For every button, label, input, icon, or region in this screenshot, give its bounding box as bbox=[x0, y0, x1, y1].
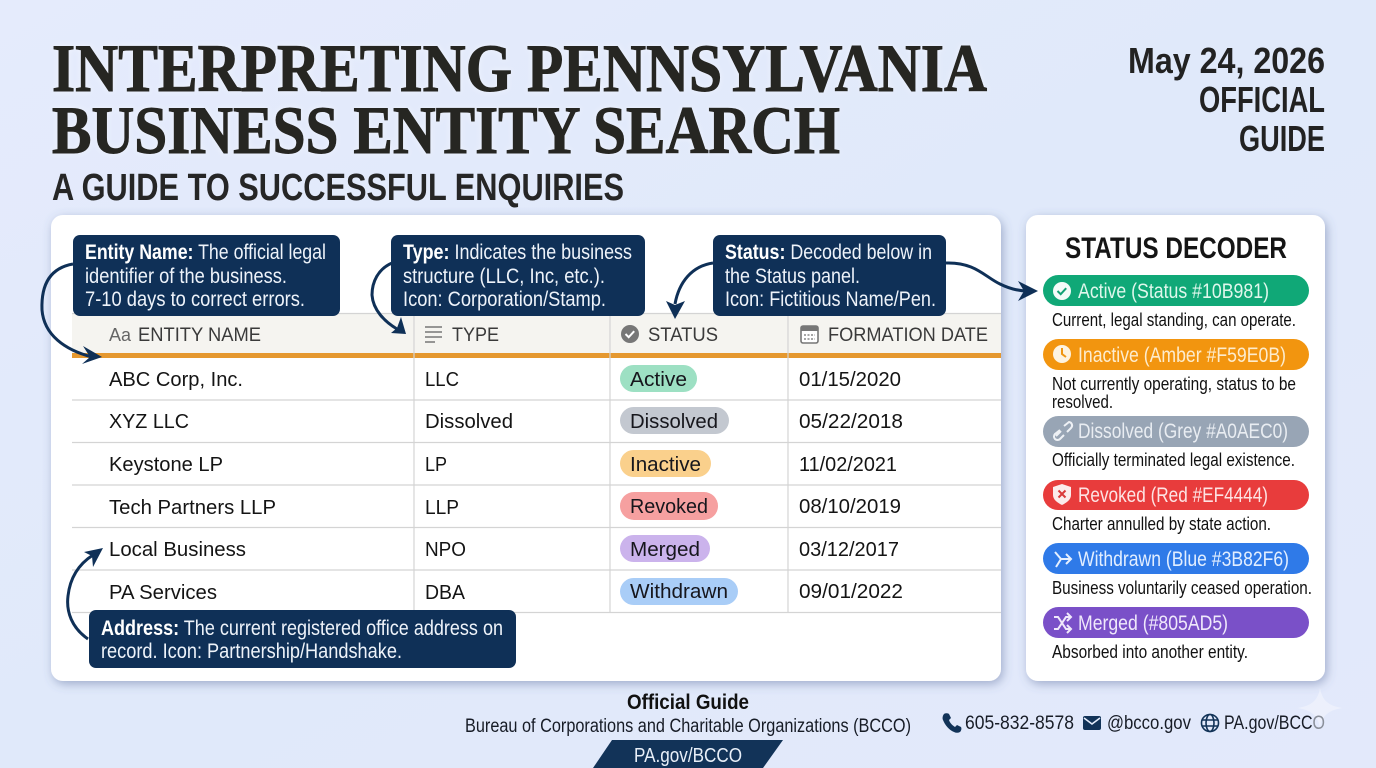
status: revoked bbox=[1043, 480, 1309, 534]
row: XYZ LLC bbox=[109, 407, 903, 434]
date and guide label: GUIDE bbox=[1239, 118, 1325, 159]
panel: status decoder bbox=[1026, 215, 1325, 681]
arrow: type bbox=[372, 263, 406, 334]
icon: globe bbox=[1202, 714, 1218, 732]
row: Keystone LP: Keystone LP bbox=[109, 453, 223, 476]
row: ABC Corp: Active bbox=[630, 368, 687, 391]
row: Keystone LP bbox=[109, 450, 897, 477]
decorative sparkle bbox=[1297, 688, 1343, 728]
subtitle: A GUIDE TO SUCCESSFUL ENQUIRIES bbox=[52, 167, 624, 209]
callout: address bbox=[89, 610, 516, 668]
arrow: status bbox=[666, 263, 713, 319]
row: XYZ LLC: 05/22/2018 bbox=[799, 410, 903, 433]
row: Keystone LP: Inactive bbox=[630, 453, 701, 476]
row: Keystone LP: LP bbox=[425, 453, 447, 476]
callout: type: structure (LLC, Inc, etc.). bbox=[403, 265, 605, 288]
date and guide label: OFFICIAL bbox=[1199, 79, 1325, 120]
status: revoked: Charter annulled by state action. bbox=[1052, 514, 1271, 534]
row: ABC Corp: LLC bbox=[425, 368, 459, 391]
row: ABC Corp bbox=[109, 365, 901, 392]
callout: entity name bbox=[73, 235, 340, 316]
status: active: Current, legal standing, can operate. bbox=[1052, 310, 1296, 330]
status: withdrawn: Business voluntarily ceased operation. bbox=[1052, 578, 1312, 598]
panel: entity table bbox=[51, 215, 1001, 681]
callout: type: Type: Indicates the business bbox=[403, 241, 632, 264]
row: PA Services: PA Services bbox=[109, 581, 217, 604]
row: PA Services: 09/01/2022 bbox=[799, 580, 903, 603]
status: inactive: Inactive (Amber #F59E0B) bbox=[1078, 344, 1286, 367]
status: merged: Merged (#805AD5) bbox=[1078, 612, 1228, 635]
row: Tech Partners LLP bbox=[109, 492, 901, 520]
status: merged: Absorbed into another entity. bbox=[1052, 642, 1248, 662]
status: active: Active (Status #10B981) bbox=[1078, 280, 1269, 303]
table header bbox=[72, 314, 1001, 358]
footer: contact details bbox=[943, 713, 1325, 734]
row: XYZ LLC: XYZ LLC bbox=[109, 410, 189, 433]
row: Local Business bbox=[109, 535, 899, 562]
status: dissolved: Dissolved (Grey #A0AEC0) bbox=[1078, 420, 1288, 443]
footer: contact details: @bcco.gov bbox=[1107, 713, 1191, 734]
row: Local Business: 03/12/2017 bbox=[799, 538, 899, 561]
title: INTERPRETING PENNSYLVANIA bbox=[52, 30, 987, 106]
arrow: entity name bbox=[42, 264, 102, 364]
date and guide label: May 24, 2026 bbox=[1128, 40, 1325, 81]
status: withdrawn bbox=[1043, 543, 1312, 598]
icon: envelope bbox=[1083, 716, 1101, 730]
status: merged bbox=[1043, 607, 1309, 662]
footer: organisation bbox=[465, 691, 911, 737]
row: Tech Partners LLP: Revoked bbox=[630, 495, 708, 518]
callout: status: Status: Decoded below in bbox=[725, 241, 932, 264]
table header: TYPE bbox=[452, 324, 499, 346]
table header: FORMATION DATE bbox=[828, 324, 988, 346]
status: inactive bbox=[1043, 339, 1309, 412]
footer: url banner: PA.gov/BCCO bbox=[634, 745, 742, 767]
row: Local Business: Local Business bbox=[109, 538, 246, 561]
icon: phone bbox=[943, 713, 961, 733]
callout: type: Icon: Corporation/Stamp. bbox=[403, 288, 606, 311]
status: active bbox=[1043, 275, 1309, 330]
table header: ENTITY NAME bbox=[138, 324, 261, 346]
callout: address: record. Icon: Partnership/Handshake. bbox=[101, 640, 402, 663]
table header: Aa bbox=[109, 325, 132, 345]
row: XYZ LLC: Dissolved bbox=[425, 410, 513, 433]
row: Tech Partners LLP: LLP bbox=[425, 496, 459, 519]
title: BUSINESS ENTITY SEARCH bbox=[52, 92, 840, 168]
status: revoked: Revoked (Red #EF4444) bbox=[1078, 484, 1268, 507]
callout: status bbox=[713, 235, 946, 316]
status: withdrawn: Withdrawn (Blue #3B82F6) bbox=[1078, 548, 1289, 571]
row: XYZ LLC: Dissolved bbox=[630, 410, 718, 433]
status: inactive: resolved. bbox=[1052, 392, 1113, 412]
footer: organisation: Official Guide bbox=[627, 691, 749, 714]
callout: status: Icon: Fictitious Name/Pen. bbox=[725, 288, 936, 311]
callout: status: the Status panel. bbox=[725, 265, 860, 288]
decoder heading: STATUS DECODER bbox=[1065, 232, 1287, 265]
row: PA Services: Withdrawn bbox=[630, 580, 728, 603]
callout: entity name: identifier of the business. bbox=[85, 265, 287, 288]
row: ABC Corp: 01/15/2020 bbox=[799, 368, 901, 391]
status: dissolved bbox=[1043, 416, 1309, 470]
status: dissolved: Officially terminated legal existence. bbox=[1052, 450, 1295, 470]
arrow: status to decoder bbox=[946, 263, 1038, 301]
callout: entity name: Entity Name: The official legal bbox=[85, 241, 326, 264]
status: inactive: Not currently operating, status to be bbox=[1052, 374, 1296, 394]
date and guide label bbox=[1128, 40, 1325, 159]
table header: STATUS bbox=[648, 324, 718, 346]
row: ABC Corp: ABC Corp, Inc. bbox=[109, 368, 243, 391]
row: PA Services bbox=[109, 578, 903, 605]
row: Keystone LP: 11/02/2021 bbox=[799, 453, 897, 476]
footer: organisation: Bureau of Corporations and Charitable Organizations (BCCO) bbox=[465, 716, 911, 737]
row: Tech Partners LLP: 08/10/2019 bbox=[799, 495, 901, 518]
title bbox=[52, 30, 987, 168]
callout: type bbox=[391, 235, 645, 316]
footer: url banner bbox=[593, 740, 783, 768]
footer: contact details: PA.gov/BCCO bbox=[1224, 713, 1325, 734]
arrow: address bbox=[68, 548, 103, 639]
row: Local Business: Merged bbox=[630, 538, 700, 561]
callout: entity name: 7-10 days to correct errors. bbox=[85, 288, 305, 311]
row: PA Services: DBA bbox=[425, 581, 465, 604]
footer: contact details: 605-832-8578 bbox=[965, 713, 1074, 734]
row: Tech Partners LLP: Tech Partners LLP bbox=[109, 496, 276, 519]
callout: address: Address: The current registered office address on bbox=[101, 617, 503, 640]
row: Local Business: NPO bbox=[425, 538, 466, 561]
